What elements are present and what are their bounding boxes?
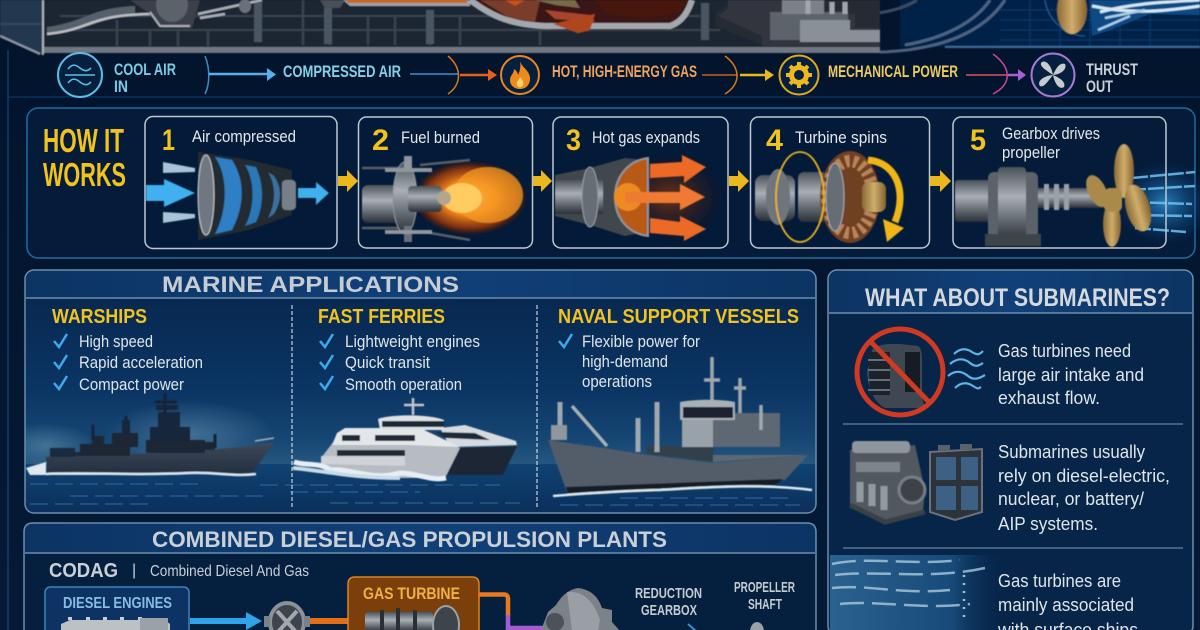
checklist xyxy=(320,332,480,394)
label: propeller shaft xyxy=(734,579,795,613)
sky cloud xyxy=(121,406,259,453)
step 5: gearbox drives propeller xyxy=(953,117,1200,248)
icon: fan xyxy=(1032,54,1074,96)
label: gearbox drives propeller xyxy=(1002,124,1100,162)
text: gas turbines need: large air intake and xyxy=(998,365,1144,385)
energy flow strip xyxy=(58,53,1138,97)
text: submarines rely on: nuclear, or battery/ xyxy=(998,489,1144,509)
hot turbine section xyxy=(470,0,692,33)
text: gas turbines need xyxy=(998,341,1144,408)
step 3: hot gas expands xyxy=(553,117,728,248)
panel: combined diesel/gas propulsion plants xyxy=(24,523,816,630)
water scene xyxy=(830,555,985,630)
text: gas turbines need: Gas turbines need xyxy=(998,341,1131,361)
wake water xyxy=(1090,0,1200,36)
inlet duct xyxy=(47,6,135,33)
column: fast ferries xyxy=(293,306,517,479)
panel: how it works xyxy=(27,108,1200,258)
subheading: codag: Combined Diesel And Gas xyxy=(150,563,309,580)
heading: marine applications: MARINE APPLICATIONS xyxy=(162,272,459,297)
arrow: step 1 to 2 xyxy=(338,170,358,192)
label: thrust out xyxy=(1086,60,1138,96)
compressor section xyxy=(130,0,262,28)
heading: combined plants: COMBINED DIESEL/GAS PROPULSION PLANTS xyxy=(152,527,667,552)
description: operations xyxy=(582,372,652,391)
checklist: Lightweight engines xyxy=(345,332,480,351)
label: propeller shaft: SHAFT xyxy=(748,596,782,613)
clutch wheel xyxy=(264,603,310,630)
heading: how it works xyxy=(43,122,126,193)
illustration: catamaran ferry xyxy=(293,398,517,479)
text: gas turbines need: exhaust flow. xyxy=(998,388,1100,408)
hero illustration: gas turbine propulsion cutaway xyxy=(0,0,1200,55)
arrow: to hot gas xyxy=(410,56,497,94)
label: reduction gearbox: GEARBOX xyxy=(641,602,697,619)
checklist xyxy=(54,332,203,394)
description: Flexible power for xyxy=(582,332,700,351)
wave texture xyxy=(30,484,800,505)
label: cool air in: IN xyxy=(114,77,128,96)
checklist: High speed xyxy=(79,332,153,351)
step 1: air compressed xyxy=(145,116,337,248)
hull cutaway frame xyxy=(0,0,880,55)
step 3: hot gas expands: Hot gas expands xyxy=(592,128,700,147)
label: propeller shaft: PROPELLER xyxy=(734,579,795,596)
gas turbine box: GAS TURBINE xyxy=(363,584,460,603)
arrow: diesel to clutch xyxy=(190,612,262,630)
subheading: codag: | xyxy=(132,562,136,579)
combustor xyxy=(320,0,470,8)
arrow: to thrust xyxy=(966,54,1026,94)
subheading: codag: CODAG xyxy=(49,560,118,582)
gas turbine box xyxy=(348,577,479,630)
diesel engines box xyxy=(45,587,189,630)
step 1: air compressed: 1 xyxy=(162,124,175,157)
label: gearbox drives propeller: Gearbox drives xyxy=(1002,124,1100,143)
checklist: Quick transit xyxy=(345,353,430,372)
propeller blade xyxy=(1057,0,1087,34)
column: warships xyxy=(26,306,274,475)
panel: what about submarines xyxy=(828,270,1193,630)
panel: marine applications xyxy=(0,270,816,513)
column: fast ferries: FAST FERRIES xyxy=(318,306,445,328)
step 4: turbine spins: 4 xyxy=(766,124,783,157)
column: naval support vessels: NAVAL SUPPORT VESSELS xyxy=(558,306,799,328)
icon: turbine rotor xyxy=(755,151,904,243)
checklist: Compact power xyxy=(79,375,184,394)
description: high-demand xyxy=(582,352,668,371)
text: surface ships xyxy=(997,571,1138,630)
step 2: fuel burned xyxy=(358,117,532,248)
illustration: warship xyxy=(26,393,274,475)
icon: burner and flame xyxy=(362,156,528,242)
small pointer xyxy=(688,624,696,630)
arrow: to mechanical power xyxy=(702,56,774,94)
label: cool air in: COOL AIR xyxy=(114,60,176,79)
reduction gearbox xyxy=(541,588,620,630)
text: submarines rely on: rely on diesel-electric, xyxy=(998,466,1170,486)
propeller tip xyxy=(750,622,764,630)
arrow: step 4 to 5 xyxy=(930,170,951,192)
icon: no air intake xyxy=(857,329,943,415)
icon: gear xyxy=(780,56,818,94)
icon: expanding gas turbine xyxy=(555,152,725,242)
diesel engines box: DIESEL ENGINES xyxy=(63,595,172,612)
step 1: air compressed: Air compressed xyxy=(192,127,296,146)
drive pipe to gearbox xyxy=(479,594,545,628)
label: cool air in xyxy=(114,60,176,96)
icon: compressor xyxy=(146,152,329,240)
label: compressed air: COMPRESSED AIR xyxy=(283,62,401,81)
step 4: turbine spins xyxy=(750,117,930,248)
text: surface ships: mainly associated xyxy=(998,595,1134,615)
icon: diesel engine xyxy=(850,441,925,522)
icon: battery pack xyxy=(930,444,982,520)
arrow: to compressed air xyxy=(205,56,276,94)
label: thrust out: OUT xyxy=(1086,77,1113,96)
checklist: Smooth operation xyxy=(345,375,462,394)
label: gearbox drives propeller: propeller xyxy=(1002,143,1060,162)
heading: how it works: WORKS xyxy=(43,156,126,193)
reduction gearbox machine xyxy=(715,0,880,46)
column: warships: WARSHIPS xyxy=(52,306,147,328)
panel: right blueprint background xyxy=(850,0,1200,52)
arrow: step 3 to 4 xyxy=(729,170,749,192)
label: reduction gearbox xyxy=(635,585,702,619)
label: thrust out: THRUST xyxy=(1086,60,1138,79)
orange pipe to gas turbine xyxy=(310,618,365,624)
step 2: fuel burned: Fuel burned xyxy=(401,128,480,147)
text: submarines rely on: AIP systems. xyxy=(998,514,1098,534)
text: submarines rely on xyxy=(998,442,1170,534)
step 3: hot gas expands: 3 xyxy=(566,124,581,157)
icon: air waves xyxy=(948,349,985,388)
label: reduction gearbox: REDUCTION xyxy=(635,585,702,602)
step 2: fuel burned: 2 xyxy=(372,124,389,157)
step 5: gearbox drives propeller: 5 xyxy=(970,124,986,157)
checklist: Rapid acceleration xyxy=(79,353,203,372)
label: hot high-energy gas: HOT, HIGH-ENERGY GAS xyxy=(552,62,697,81)
step 4: turbine spins: Turbine spins xyxy=(795,128,887,147)
column: naval support vessels xyxy=(548,306,812,496)
icon: flame xyxy=(501,56,539,94)
label: mechanical power: MECHANICAL POWER xyxy=(828,62,958,81)
subheading: codag xyxy=(49,560,309,582)
illustration: support ship xyxy=(548,357,812,496)
description xyxy=(559,332,700,391)
icon: gearbox, shaft and propeller xyxy=(955,144,1156,247)
text: surface ships: Gas turbines are xyxy=(998,571,1121,591)
icon: cool air xyxy=(58,53,102,97)
heading: how it works: HOW IT xyxy=(43,122,124,159)
arrow: step 2 to 3 xyxy=(533,170,552,192)
text: submarines rely on: Submarines usually xyxy=(998,442,1145,462)
